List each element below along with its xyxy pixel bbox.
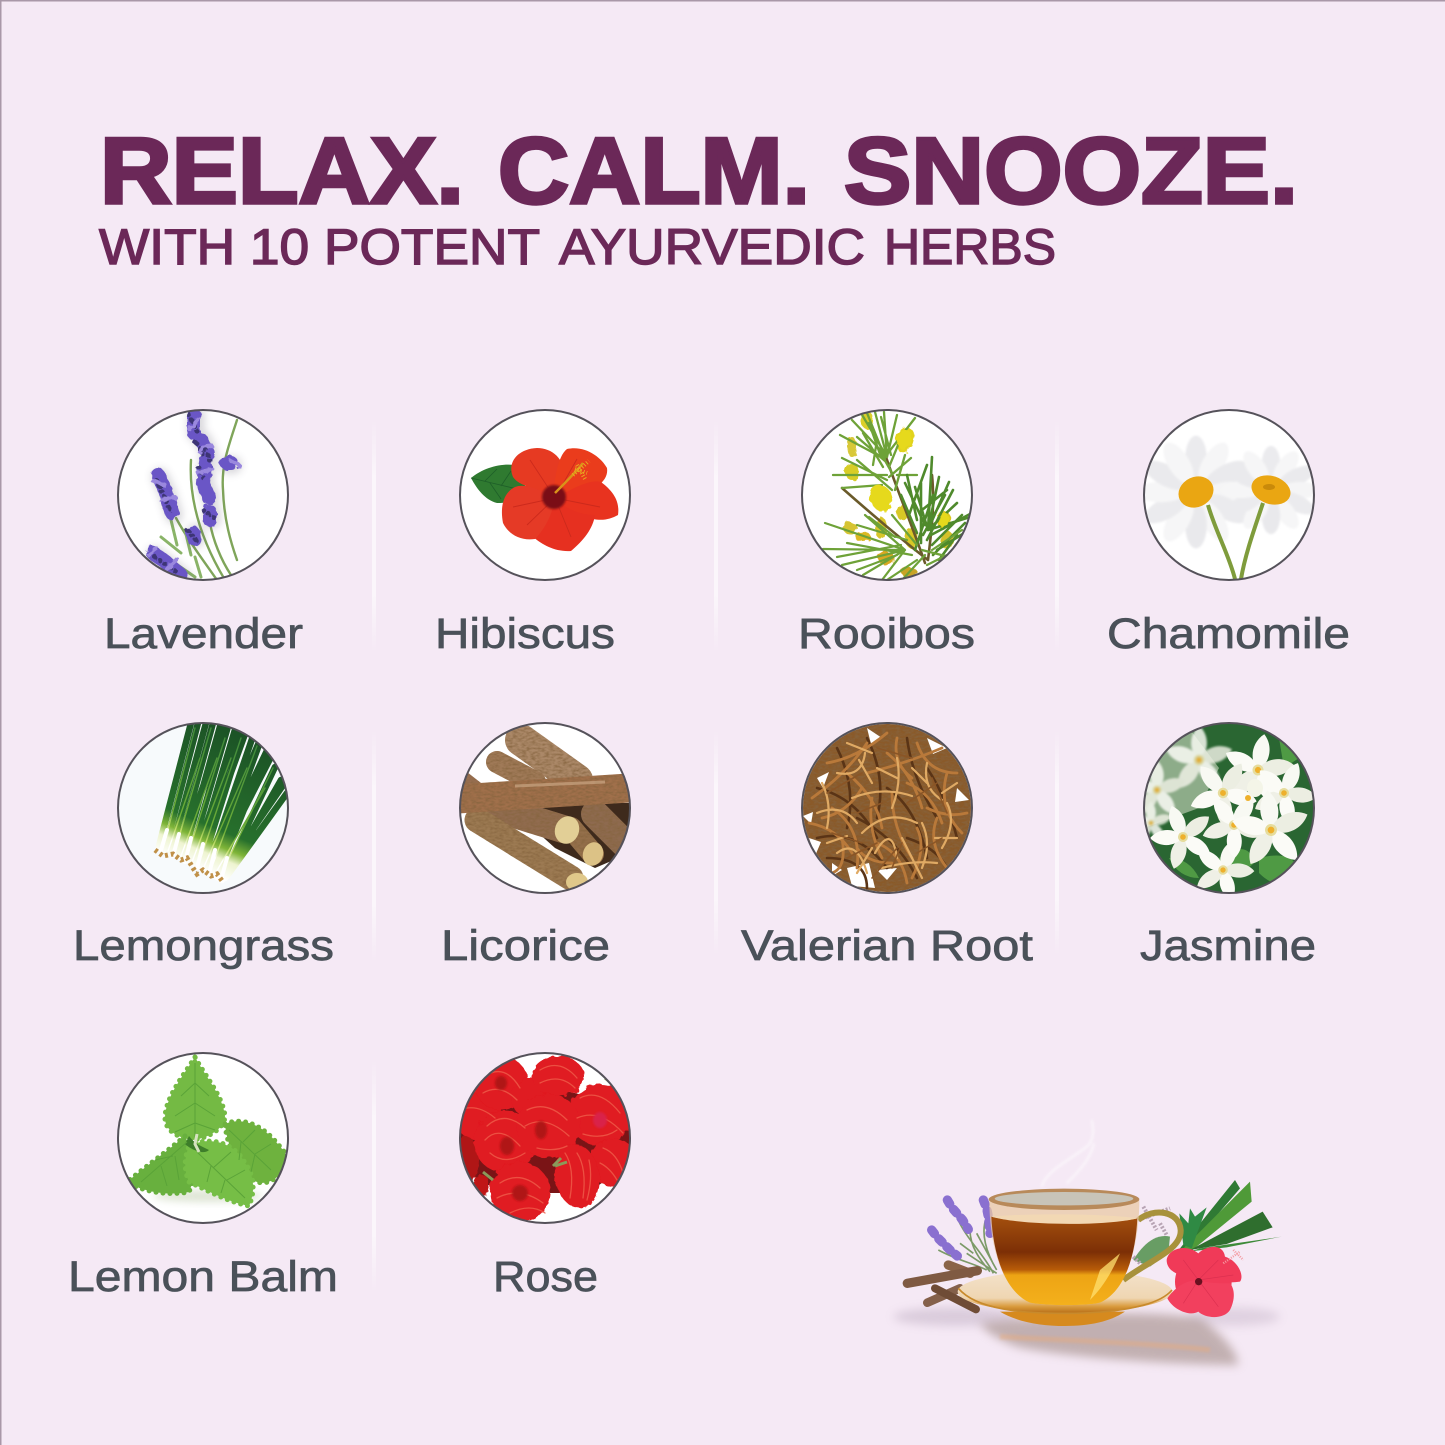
label: Hibiscus <box>435 610 615 658</box>
title: CALM. <box>498 118 810 223</box>
label: Licorice <box>441 922 610 970</box>
cup handle <box>1123 1212 1181 1280</box>
panel: lemongrass <box>73 723 334 970</box>
hibiscus flower <box>1167 1247 1243 1317</box>
icon: chamomile <box>1137 410 1321 580</box>
licorice sticks <box>907 1265 977 1309</box>
panel: valerian root <box>741 723 1033 970</box>
label: Lavender <box>104 610 303 658</box>
label: Lemongrass <box>73 922 334 970</box>
cup shadow <box>893 1307 1280 1365</box>
saucer <box>958 1270 1172 1326</box>
panel: rose <box>459 1052 631 1292</box>
herbs behind the cup <box>1133 1207 1170 1267</box>
label: Rooibos <box>798 610 975 658</box>
lemongrass and leaves <box>1179 1180 1282 1251</box>
title <box>100 118 1298 223</box>
icon: lemon balm <box>118 1053 288 1223</box>
lavender sprigs <box>932 1200 997 1273</box>
steam <box>1042 1120 1094 1187</box>
subtitle <box>99 219 1056 275</box>
subtitle: AYURVEDIC <box>559 219 865 275</box>
panel: rooibos <box>798 410 975 658</box>
icon: licorice <box>457 723 634 893</box>
title: SNOOZE. <box>844 118 1298 223</box>
label: Chamomile <box>1107 610 1350 658</box>
glass cup with tea <box>989 1189 1139 1305</box>
subtitle: HERBS <box>884 219 1056 275</box>
icon: rose <box>451 1053 638 1223</box>
icon: lavender <box>118 410 288 580</box>
title: RELAX. <box>100 118 464 223</box>
label: Rose <box>493 1253 598 1301</box>
panel: hibiscus <box>435 410 630 658</box>
panel: lavender <box>104 410 303 658</box>
icon: hibiscus <box>460 410 630 580</box>
subtitle: WITH 10 POTENT <box>99 219 540 275</box>
label: Lemon Balm <box>68 1253 338 1301</box>
panel: licorice <box>441 723 634 970</box>
icon: rooibos <box>802 410 972 580</box>
icon: lemongrass <box>118 723 288 893</box>
panel: jasmine <box>1140 722 1315 961</box>
label: Jasmine <box>1140 922 1316 970</box>
label: Valerian Root <box>741 922 1033 970</box>
icon: valerian root <box>802 723 972 893</box>
teacup illustration <box>893 1120 1282 1365</box>
panel: lemon balm <box>68 1053 338 1301</box>
icon: jasmine <box>1143 722 1315 894</box>
panel: chamomile <box>1107 410 1350 658</box>
